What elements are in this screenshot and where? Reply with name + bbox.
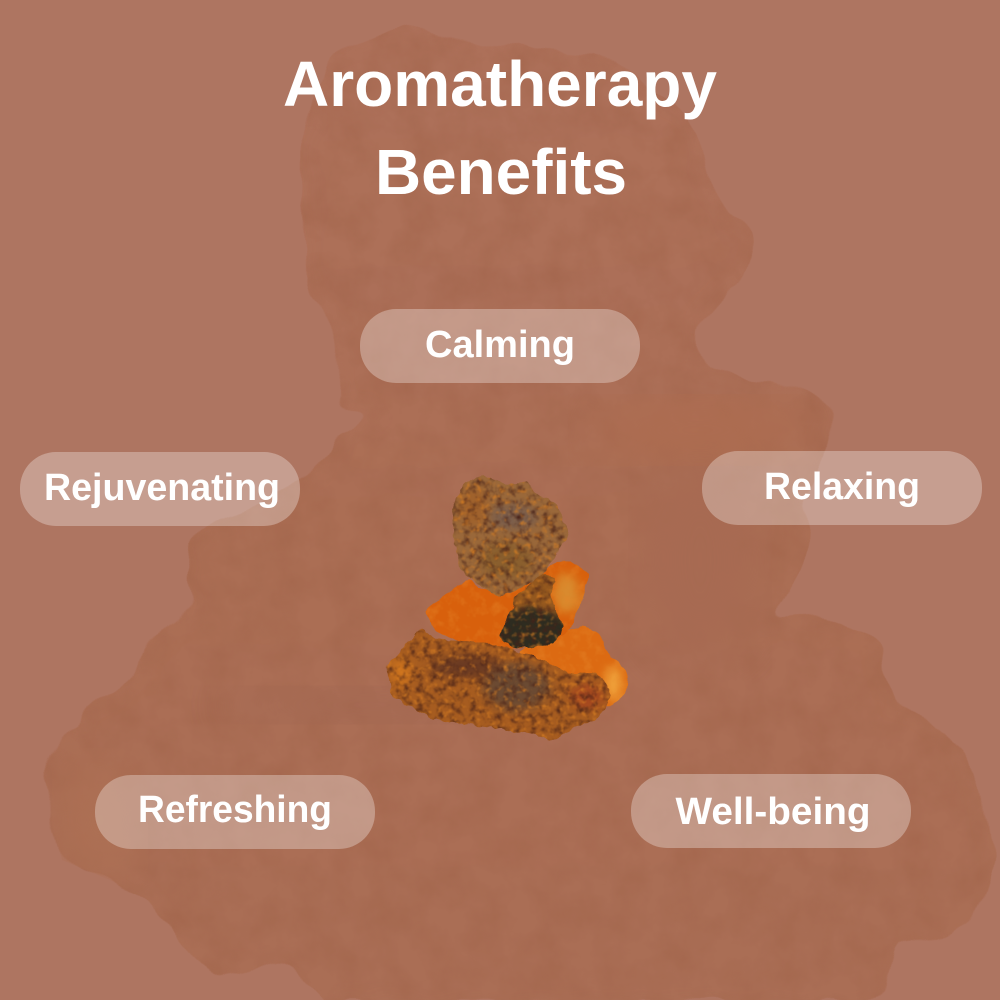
pill: Relaxing: Relaxing — [764, 466, 920, 508]
pill: Rejuvenating: Rejuvenating — [44, 467, 280, 509]
pill: Refreshing — [95, 775, 375, 849]
pill: Well-being: Well-being — [676, 791, 870, 833]
pill: Calming: Calming — [425, 324, 575, 366]
pill: Rejuvenating — [20, 452, 300, 526]
pill: Calming — [360, 309, 640, 383]
title: Aromatherapy — [283, 48, 717, 120]
bottom brown lump — [387, 628, 612, 740]
title — [283, 48, 717, 208]
middle amber lump — [425, 562, 590, 650]
pill: Relaxing — [702, 451, 982, 525]
dark shard — [499, 572, 563, 648]
pill: Refreshing: Refreshing — [138, 789, 332, 831]
central resin stack — [387, 476, 628, 740]
title: Benefits — [375, 136, 627, 208]
top brown lump — [453, 476, 570, 597]
bottom right amber lump — [517, 626, 628, 708]
pill: Well-being — [631, 774, 911, 848]
